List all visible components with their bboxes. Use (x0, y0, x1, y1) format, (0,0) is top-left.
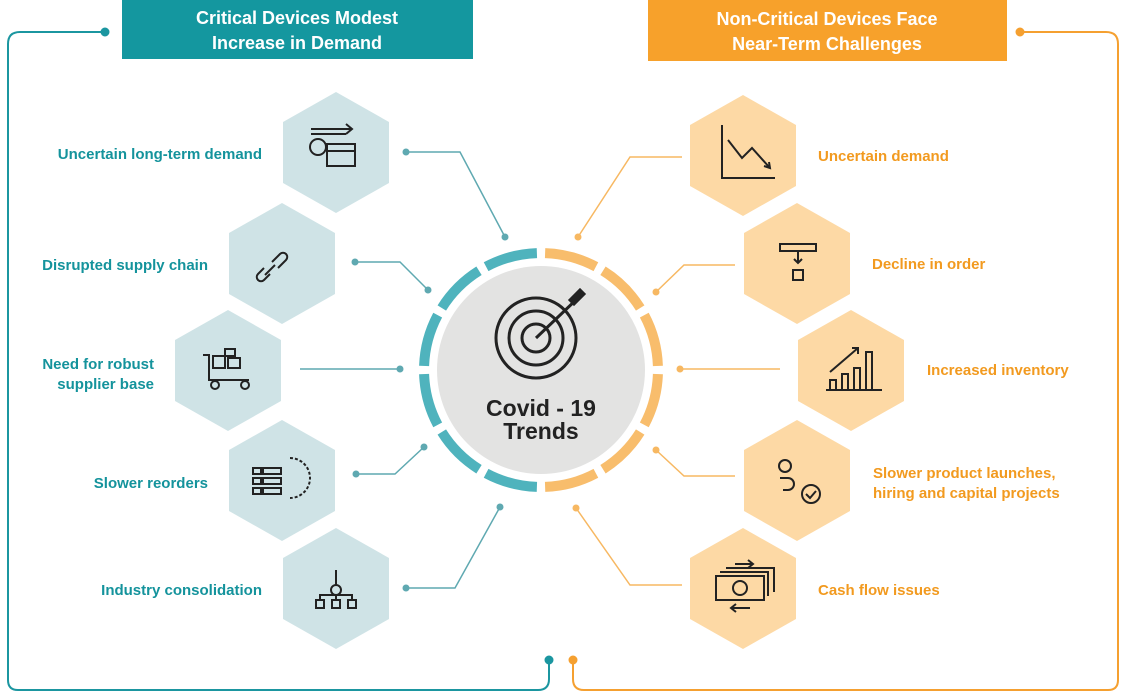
labels left: Slower reorders (94, 475, 208, 492)
icons right (716, 125, 882, 612)
center circle (437, 266, 645, 474)
header: critical devices: Increase in Demand (212, 33, 382, 53)
connectors right (572, 157, 780, 585)
labels right: Uncertain demand (818, 148, 949, 165)
labels left: Need for robust (42, 356, 154, 373)
labels right: hiring and capital projects (873, 485, 1060, 502)
center circle: Trends (503, 418, 579, 444)
labels left: Disrupted supply chain (42, 257, 208, 274)
header: non-critical devices: Near-Term Challenges (732, 34, 922, 54)
header: non-critical devices (648, 0, 1007, 61)
center ring (424, 253, 658, 487)
labels left: Uncertain long-term demand (58, 146, 262, 163)
labels right: Increased inventory (927, 362, 1069, 379)
icon: target (496, 290, 584, 378)
icons left (203, 124, 356, 608)
labels left: supplier base (57, 376, 154, 393)
right hexagons (690, 95, 904, 649)
frame: left border (8, 28, 552, 690)
labels left (42, 146, 262, 599)
frame: right border (570, 28, 1118, 690)
labels right: Slower product launches, (873, 465, 1056, 482)
labels right: Cash flow issues (818, 582, 940, 599)
header: non-critical devices: Non-Critical Devices Face (716, 9, 938, 29)
center circle: Covid - 19 (486, 395, 596, 421)
left hexagons (175, 92, 389, 649)
header: critical devices: Critical Devices Modest (196, 8, 398, 28)
labels right: Decline in order (872, 256, 986, 273)
labels left: Industry consolidation (101, 582, 262, 599)
connectors left (300, 148, 508, 592)
header: critical devices (122, 0, 473, 59)
labels right (818, 148, 1069, 599)
